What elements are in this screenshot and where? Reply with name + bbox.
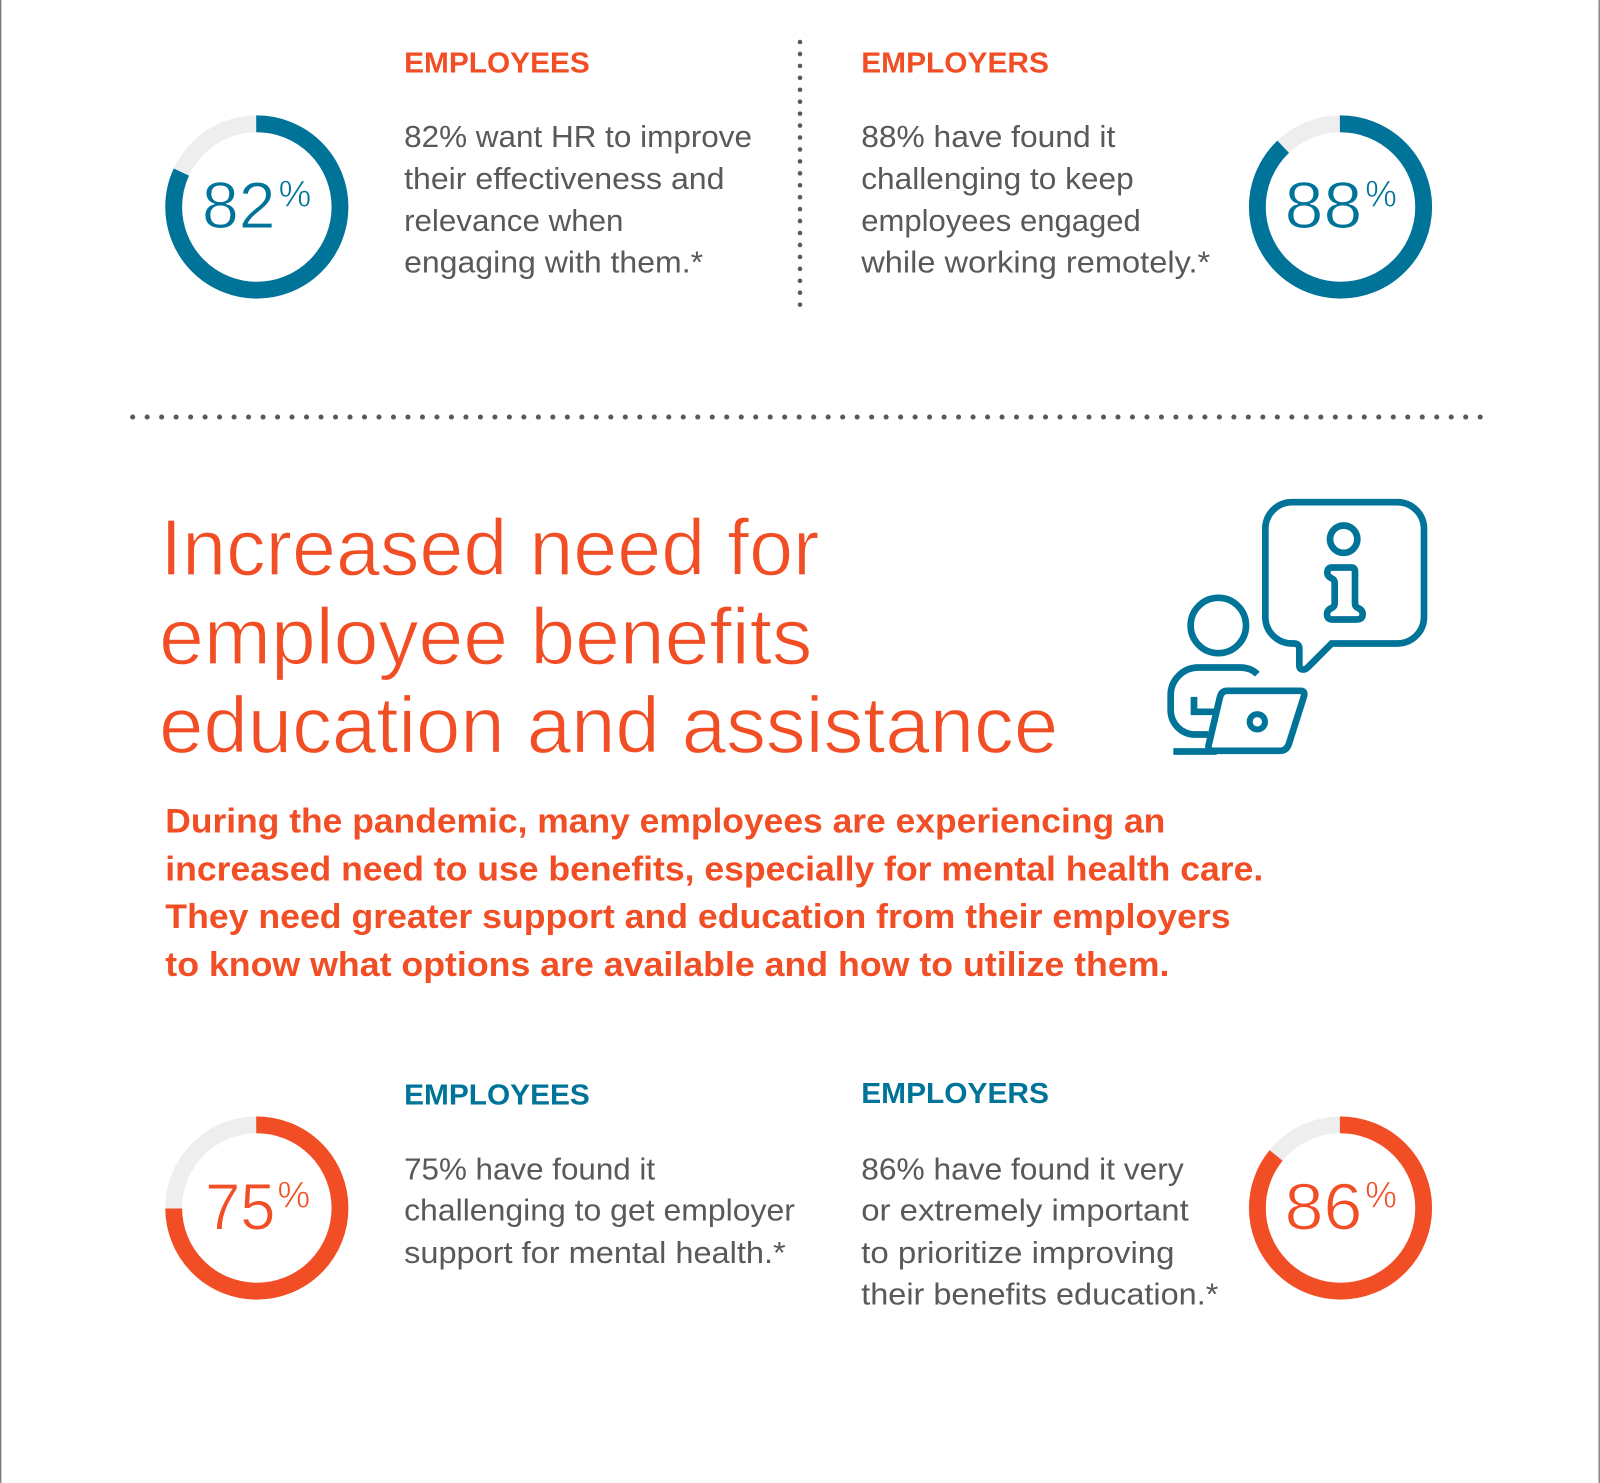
- panel: employers stat 86%: [861, 1078, 1424, 1311]
- icon: info stem: [1327, 568, 1363, 620]
- text block: employers finding: while working remotely.*: [860, 247, 1211, 280]
- text block: employers finding: 86% have found it very: [861, 1153, 1184, 1186]
- text block: employers finding: 88% have found it: [861, 121, 1116, 154]
- icon: desk line: [1173, 742, 1217, 762]
- text block: intro paragraph: [165, 802, 1263, 984]
- text block: employers finding: employees engaged: [861, 205, 1141, 238]
- title: [159, 503, 1058, 770]
- heading: employers: EMPLOYERS: [861, 1078, 1049, 1110]
- icon: speech bubble: [1265, 502, 1424, 670]
- text block: employees finding: support for mental health.*: [404, 1237, 786, 1270]
- panel: employers stat 88%: [860, 48, 1424, 290]
- donut chart: 75%: [174, 1125, 340, 1291]
- title: employee benefits: [159, 592, 812, 681]
- donut chart: 86%: 86: [1285, 1170, 1362, 1244]
- icon: laptop logo: [1250, 714, 1265, 730]
- text block: employees finding: [404, 121, 752, 280]
- title: education and assistance: [159, 681, 1058, 770]
- text block: employees finding: engaging with them.*: [404, 247, 703, 280]
- donut chart: 75%: 75: [205, 1170, 276, 1244]
- donut chart: 88%: %: [1365, 173, 1397, 214]
- donut chart: 86%: %: [1365, 1174, 1397, 1215]
- icon: person body: [1171, 668, 1257, 735]
- text block: intro paragraph: During the pandemic, many employees are experiencing an: [165, 802, 1165, 840]
- text block: intro paragraph: to know what options are available and how to utilize them.: [165, 946, 1169, 984]
- text block: employees finding: relevance when: [404, 205, 623, 238]
- panel: employees stat 75%: [174, 1079, 795, 1291]
- donut chart: 88%: [1257, 124, 1424, 290]
- icon: person head: [1191, 598, 1246, 653]
- text block: intro paragraph: They need greater support and education from their employers: [165, 898, 1231, 936]
- icon: info dot: [1330, 526, 1357, 553]
- text block: employers finding: [861, 1153, 1219, 1311]
- donut chart: 88%: 88: [1285, 169, 1362, 243]
- donut chart: 75%: %: [278, 1174, 310, 1215]
- icon: laptop: [1208, 691, 1304, 751]
- donut chart: 86%: [1257, 1125, 1424, 1291]
- title: Increased need for: [160, 503, 819, 592]
- heading: employees: EMPLOYEES: [404, 1079, 590, 1111]
- text block: employees finding: challenging to get employer: [404, 1195, 795, 1228]
- text block: employers finding: [860, 121, 1211, 280]
- heading: employers: EMPLOYERS: [861, 48, 1049, 80]
- text block: employees finding: 75% have found it: [404, 1153, 656, 1186]
- icon: person arm: [1194, 697, 1215, 712]
- text block: employers finding: or extremely important: [861, 1195, 1189, 1228]
- text block: employers finding: to prioritize improving: [861, 1237, 1174, 1270]
- panel: employees stat 82%: [174, 48, 752, 290]
- text block: employees finding: 82% want HR to improve: [404, 121, 752, 154]
- text block: employers finding: their benefits education.*: [861, 1278, 1219, 1311]
- heading: employees: EMPLOYEES: [404, 48, 590, 80]
- donut chart: 82%: 82: [202, 169, 276, 243]
- text block: employees finding: their effectiveness and: [404, 163, 724, 196]
- text block: intro paragraph: increased need to use benefits, especially for mental health care.: [165, 850, 1263, 888]
- donut chart: 82%: [174, 124, 340, 290]
- icon: person at laptop with information speech bubble: [1171, 502, 1424, 752]
- donut chart: 82%: %: [279, 173, 311, 214]
- text block: employers finding: challenging to keep: [861, 163, 1134, 196]
- text block: employees finding: [404, 1153, 795, 1270]
